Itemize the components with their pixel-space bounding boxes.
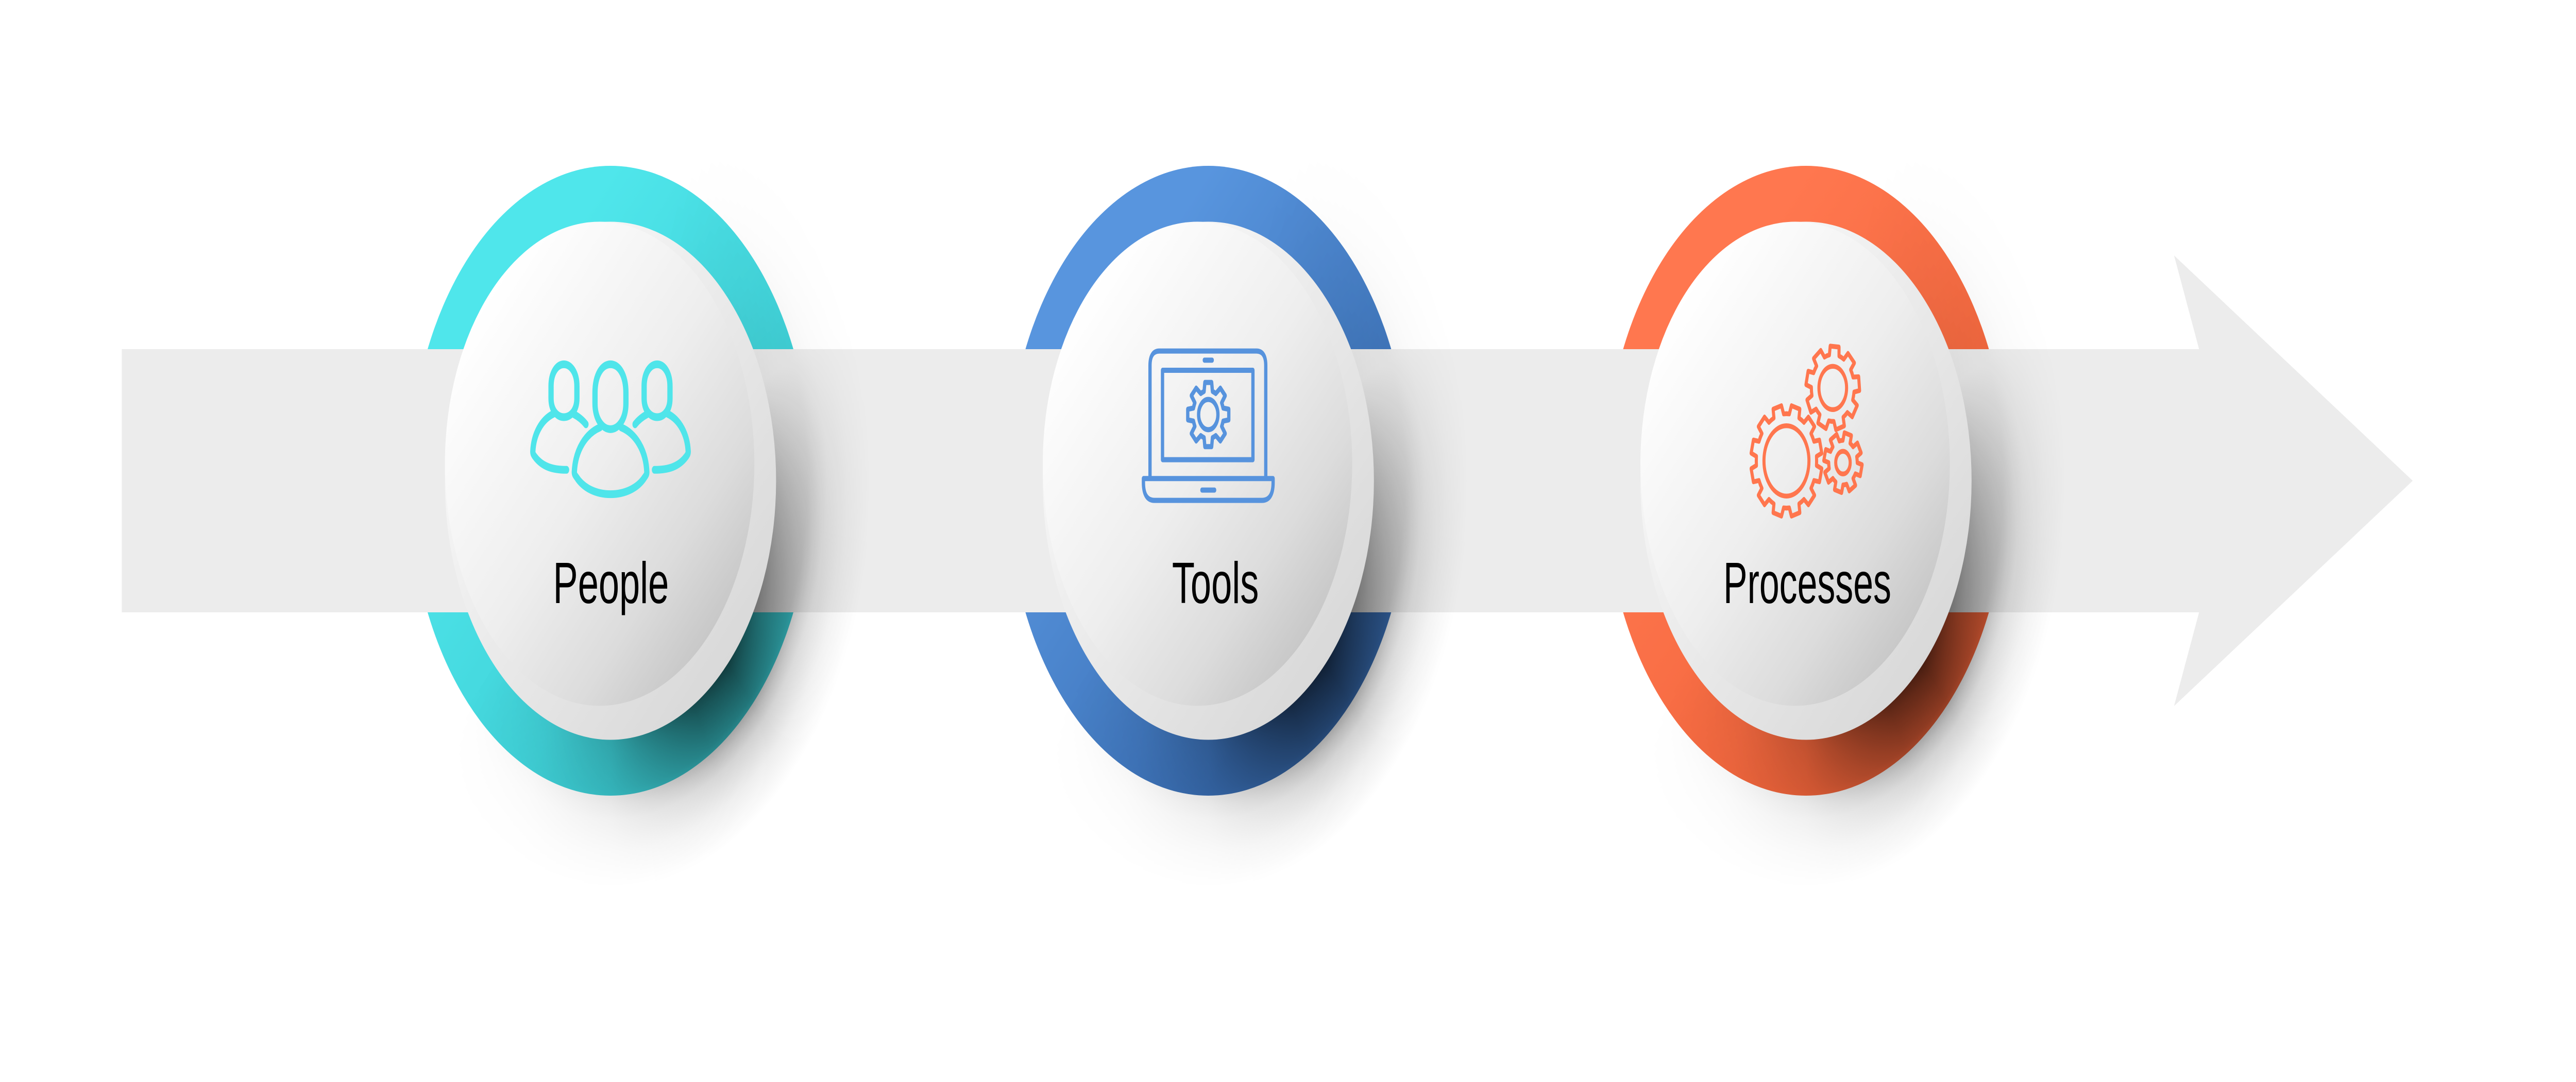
disc: people — [445, 221, 776, 740]
label: tools: Tools — [1172, 551, 1259, 616]
panel: tools — [1043, 221, 1445, 849]
ring: tools — [1007, 166, 1410, 796]
ring: processes — [1605, 166, 2007, 796]
shadow: processes — [1710, 285, 2042, 849]
ring: people — [409, 166, 812, 796]
panel: people — [445, 221, 847, 849]
disc: tools — [1043, 221, 1374, 740]
label: processes: Processes — [1723, 551, 1891, 616]
icon: people — [533, 364, 688, 494]
shadow: people — [519, 294, 847, 849]
disc: processes — [1640, 221, 1972, 740]
label: people: People — [553, 551, 669, 616]
icon: laptop with gear — [1143, 351, 1273, 501]
shadow: tools — [1120, 302, 1445, 849]
arrow — [122, 255, 2413, 706]
panel: processes — [1640, 221, 2042, 849]
icon: gears — [1750, 346, 1862, 518]
